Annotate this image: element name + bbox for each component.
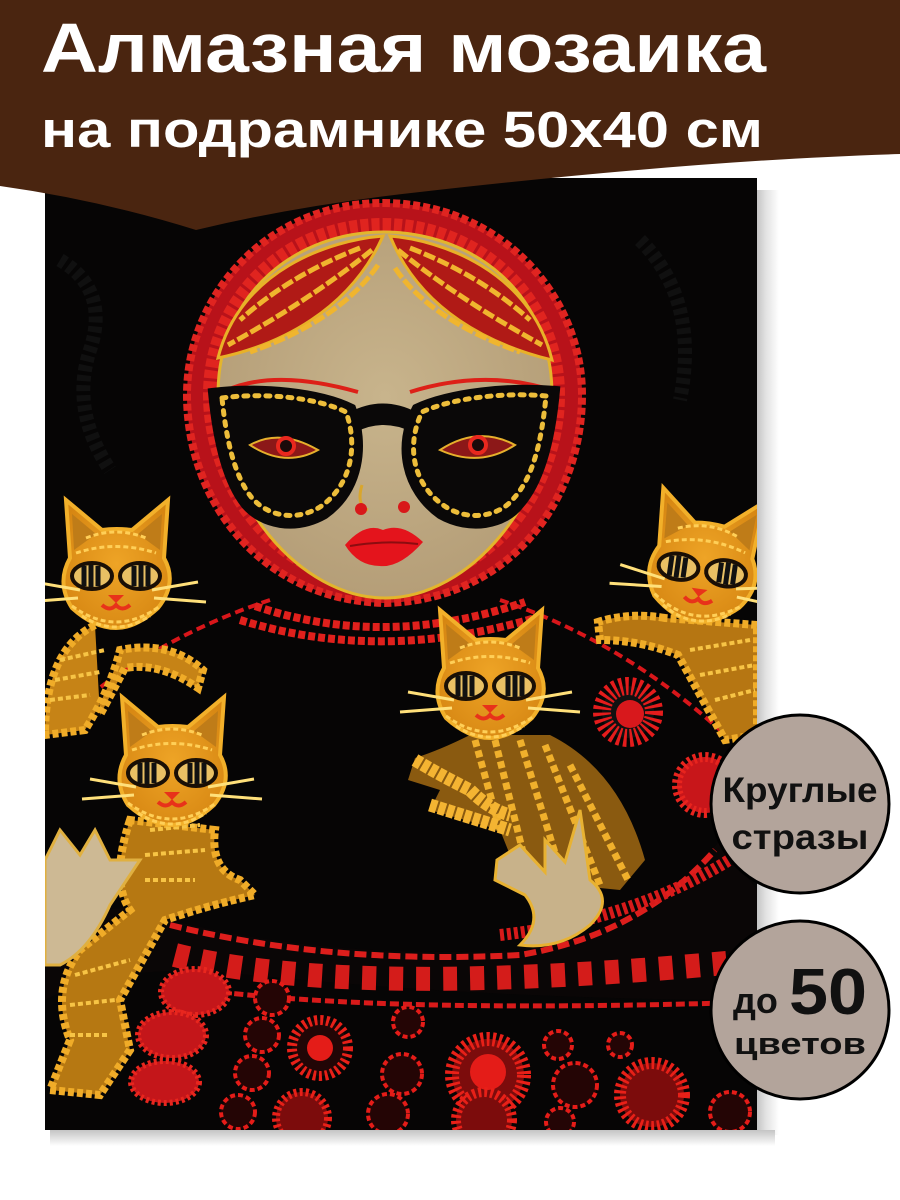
badge: round rhinestones xyxy=(711,715,889,893)
cat: top right xyxy=(594,483,757,744)
sunglasses xyxy=(212,389,556,525)
badge: round rhinestones: стразы xyxy=(732,818,868,857)
cat: centre xyxy=(400,610,645,890)
cat: top left xyxy=(26,500,206,735)
hand: left xyxy=(45,830,140,965)
red flower ornaments on right xyxy=(602,686,733,813)
badge: up to 50 colours: 50 xyxy=(789,955,867,1028)
badge: round rhinestones: Круглые xyxy=(722,771,878,810)
badge: up to 50 colours xyxy=(711,921,889,1099)
badge: up to 50 colours: до xyxy=(733,980,778,1021)
body: red outline stitches xyxy=(60,600,720,730)
cat: lower left xyxy=(50,697,262,1095)
nose dots xyxy=(360,485,368,510)
title: Алмазная мозаика xyxy=(41,9,767,87)
lips xyxy=(345,528,423,566)
subtitle: на подрамнике 50х40 см xyxy=(41,101,763,158)
face xyxy=(218,232,552,598)
artwork: embroidered matryoshka with cats xyxy=(26,178,802,1148)
shawl with ornament band xyxy=(169,848,732,1008)
hair xyxy=(218,236,383,358)
skirt flower pattern xyxy=(131,969,750,1148)
header banner xyxy=(0,0,900,230)
hand: right xyxy=(495,810,602,946)
faint background embroidery xyxy=(60,240,685,470)
headscarf xyxy=(187,203,582,603)
canvas shadow and side edge xyxy=(50,190,779,1146)
eyebrows xyxy=(232,380,545,392)
black textile background xyxy=(45,178,757,1130)
badge: up to 50 colours: цветов xyxy=(734,1026,866,1061)
